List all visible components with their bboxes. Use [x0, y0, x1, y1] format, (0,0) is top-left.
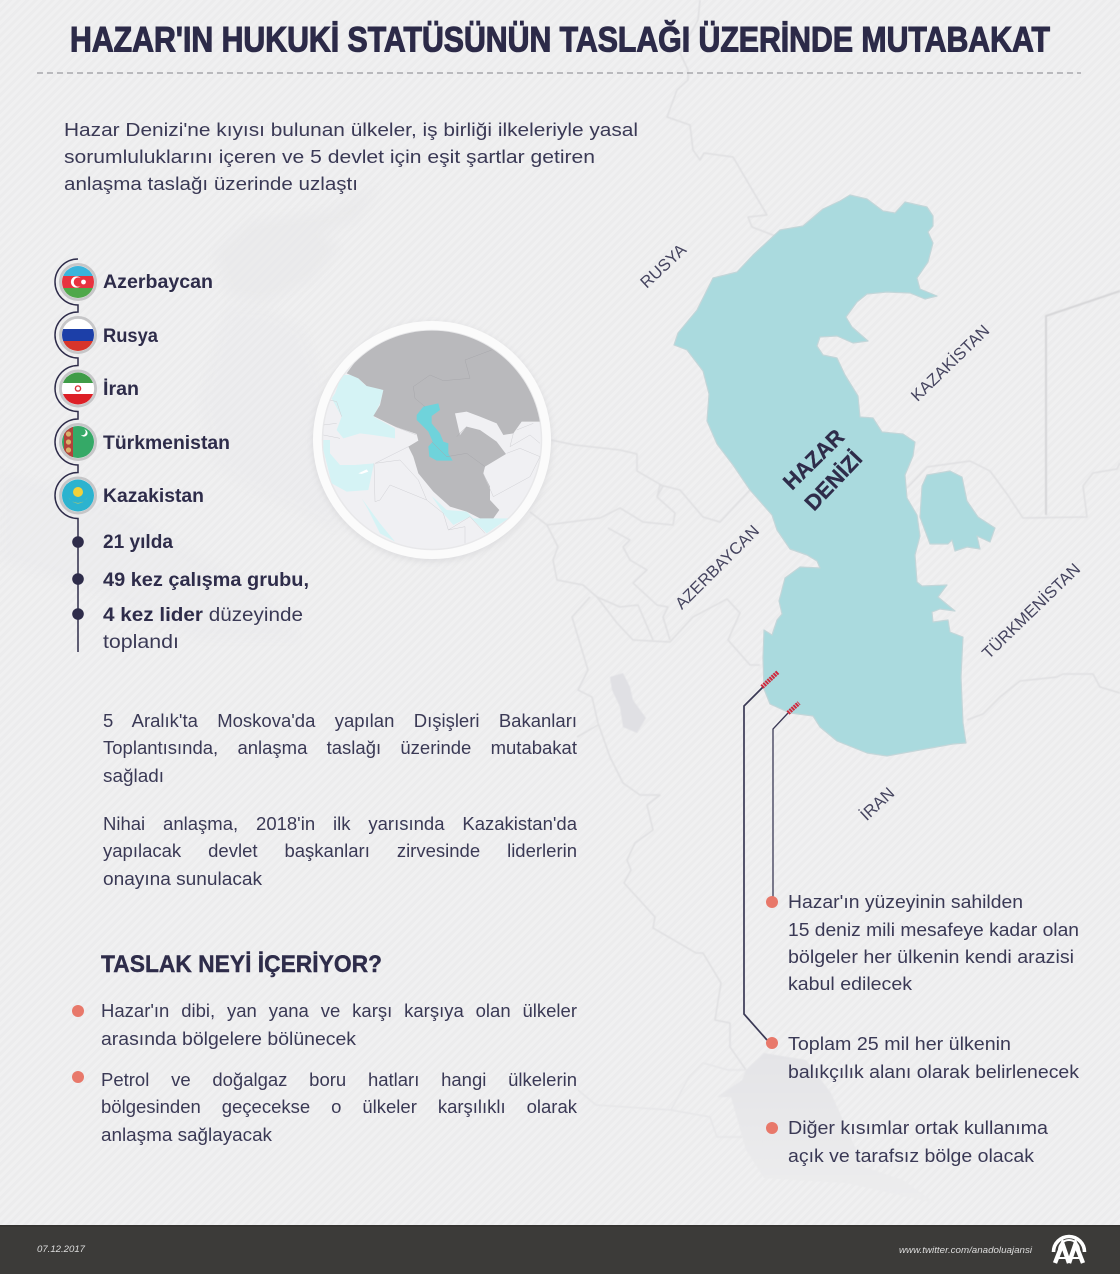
label: İran: İran — [103, 377, 139, 400]
country labels on map: RUSYA — [637, 241, 690, 292]
timeline facts: 21 yılda — [103, 531, 173, 553]
label: Rusya: Rusya — [103, 325, 158, 347]
left bullets — [72, 1005, 84, 1083]
background map: faint land shapes — [0, 186, 379, 640]
label: Hazar Denizi — [778, 424, 867, 515]
timeline facts: toplandı — [103, 631, 179, 653]
timeline facts: 4 kez lider düzeyinde — [103, 604, 303, 626]
label: Azerbaycan: Azerbaycan — [103, 271, 213, 293]
intro text: Hazar Denizi'ne kıyısı bulunan ülkeler, iş birliği ilkeleriyle yasal — [64, 119, 638, 140]
label: Türkmenistan: Türkmenistan — [103, 432, 230, 454]
right notes text: açık ve tarafsız bölge olacak — [788, 1145, 1035, 1166]
callout leader: 15 mile limit — [773, 703, 799, 900]
right notes text: bölgeler her ülkenin kendi arazisi — [788, 946, 1074, 967]
right notes bullets — [766, 896, 778, 1134]
timeline facts: 49 kez çalışma grubu, — [103, 569, 309, 591]
heading: what the draft contains: TASLAK NEYİ İÇERİYOR? — [101, 951, 382, 978]
label: Kazakistan: Kazakistan — [103, 485, 204, 507]
flag: Rusya — [60, 317, 96, 353]
left bullet short lines — [101, 1028, 357, 1145]
label: Hazar Denizi: HAZAR — [778, 424, 849, 495]
country labels on map: KAZAKİSTAN — [907, 321, 993, 405]
footer twitter: www.twitter.com/anadoluajansi — [899, 1245, 1033, 1256]
intro text — [64, 119, 638, 194]
country labels on map: TÜRKMENİSTAN — [978, 559, 1084, 663]
country labels on map: İRAN — [856, 784, 898, 824]
left bullet short lines: arasında bölgelere bölünecek — [101, 1028, 357, 1049]
paragraph 1: Moscow meeting: 5 Aralık'ta Moskova'da yapılan Dışişleri Bakanları — [103, 710, 577, 731]
background map: borders — [530, 0, 1120, 1137]
right notes text: kabul edilecek — [788, 973, 913, 994]
paragraph 2: final agreement — [103, 813, 577, 861]
background map: southern gulf — [717, 1053, 935, 1203]
right notes text — [788, 891, 1080, 1166]
timeline facts — [103, 531, 309, 653]
right notes text: Hazar'ın yüzeyinin sahilden — [788, 891, 1023, 912]
flag: Azerbaycan — [60, 264, 96, 300]
label: Hazar Denizi: DENİZİ — [799, 446, 867, 515]
intro text: sorumluluklarını içeren ve 5 devlet için eşit şartlar getiren — [64, 146, 595, 167]
Caspian Sea — [674, 195, 995, 756]
flag: İran — [60, 371, 96, 406]
footer bar — [0, 1225, 1120, 1274]
footer date: 07.12.2017 — [37, 1244, 86, 1255]
right notes text: 15 deniz mili mesafeye kadar olan — [788, 919, 1079, 940]
timeline connector — [55, 259, 78, 652]
flag: Kazakistan — [60, 478, 96, 514]
callout leader: 25 mile limit — [744, 672, 778, 1040]
country labels on map: AZERBAYCAN — [672, 522, 763, 613]
locator map circle — [312, 321, 553, 562]
right notes text: Toplam 25 mil her ülkenin — [788, 1033, 1011, 1054]
paragraph short lines: onayına sunulacak — [103, 868, 263, 889]
intro text: anlaşma taslağı üzerinde uzlaştı — [64, 173, 358, 194]
right notes text: balıkçılık alanı olarak belirlenecek — [788, 1061, 1080, 1082]
bullet 2 text: bölgesinden geçecekse o ülkeler karşılıklı olarak — [101, 1096, 577, 1117]
bullet 1 text: Hazar'ın dibi, yan yana ve karşı karşıya olan ülkeler — [101, 1000, 577, 1021]
bullet 2 text: Petrol ve doğalgaz boru hatları hangi ülkelerin — [101, 1069, 577, 1090]
paragraph short lines — [103, 765, 263, 889]
Kara-Bogaz lake — [920, 471, 995, 551]
paragraph 1: Moscow meeting: Toplantısında, anlaşma taslağı üzerinde mutabakat — [103, 737, 577, 758]
paragraph 1: Moscow meeting — [103, 710, 577, 758]
right notes text: Diğer kısımlar ortak kullanıma — [788, 1117, 1049, 1138]
paragraph 2: final agreement: Nihai anlaşma, 2018'in ilk yarısında Kazakistan'da — [103, 813, 577, 834]
bullet 2 text — [101, 1069, 577, 1117]
background map: lake Urmia — [610, 673, 646, 733]
paragraph 2: final agreement: yapılacak devlet başkanları zirvesinde liderlerin — [103, 840, 577, 861]
timeline dots — [72, 536, 84, 620]
paragraph short lines: sağladı — [103, 765, 164, 786]
country labels on map — [637, 241, 1084, 824]
AA logo — [1054, 1236, 1084, 1263]
flag: Türkmenistan — [60, 424, 96, 460]
left bullet short lines: anlaşma sağlayacak — [101, 1124, 273, 1145]
